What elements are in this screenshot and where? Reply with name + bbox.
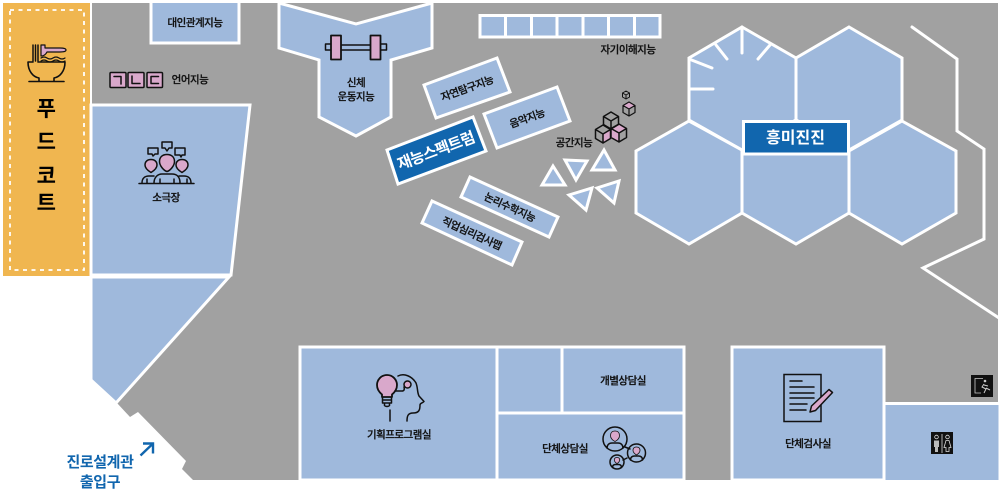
panel: physical kinesthetic intelligence: 운동지능	[338, 91, 375, 103]
panel: small theater: 소극장	[152, 192, 181, 204]
panel: individual counseling room: 개별상담실	[600, 374, 646, 387]
heading: talent spectrum: 재능스펙트럼	[395, 128, 477, 174]
panel: nature exploration intelligence	[424, 58, 510, 118]
panel: small theater	[91, 105, 250, 275]
heading: food court: 코	[37, 165, 56, 188]
panel: interpersonal intelligence: 대인관계지능	[168, 16, 223, 29]
panel: food court	[3, 3, 90, 276]
heading: interest	[744, 122, 848, 154]
icon: head with light bulb	[377, 375, 424, 421]
triangles	[542, 150, 619, 210]
panel: logic math intelligence: 논리수학지능	[482, 190, 538, 225]
panel: program planning room	[300, 347, 497, 480]
panel: small storage room	[497, 347, 562, 413]
panel: individual counseling room	[562, 347, 684, 413]
panel: language intelligence	[110, 72, 209, 88]
icon: cubes	[596, 91, 635, 143]
panel: group counseling room: 단체상담실	[542, 442, 588, 455]
icon: audience	[139, 142, 194, 184]
panel: music intelligence	[484, 87, 570, 148]
heading: talent spectrum	[387, 117, 486, 184]
heading: interest: 흥미진진	[766, 129, 825, 147]
icon: noodle bowl	[28, 45, 66, 82]
icon: barbell	[326, 36, 386, 60]
panel: logic math intelligence	[461, 177, 558, 237]
panel: nature exploration intelligence: 자연탐구지능	[439, 73, 496, 104]
icon: restroom	[931, 432, 953, 454]
icon: connected people	[603, 427, 646, 469]
panel: language intelligence: 언어지능	[172, 74, 209, 86]
callout: main entrance	[66, 444, 153, 490]
heading: food court	[37, 98, 56, 215]
panel: program planning room: 기획프로그램실	[367, 428, 431, 441]
icon: document and pencil	[784, 374, 832, 422]
heading: food court: 푸	[37, 98, 56, 121]
icon: emergency exit	[971, 375, 993, 397]
panel: music intelligence: 음악지능	[508, 106, 547, 131]
panel: lower left room	[91, 277, 229, 403]
panel: group testing room: 단체검사실	[785, 437, 831, 450]
heading: food court: 트	[37, 192, 56, 215]
panel: self-understanding intelligence	[480, 15, 660, 56]
panel: spatial intelligence	[542, 91, 635, 210]
right wall line	[912, 27, 999, 318]
panel: restroom	[884, 404, 1000, 482]
callout: main entrance: 진로설계관	[66, 454, 134, 471]
panel: physical kinesthetic intelligence: 신체	[347, 77, 365, 89]
panel: career psychology map	[422, 201, 522, 265]
panel: spatial intelligence: 공간지능	[556, 137, 593, 149]
panel: group testing room	[732, 347, 884, 480]
panel: interpersonal intelligence	[151, 2, 239, 43]
panel: self-understanding intelligence: 자기이해지능	[601, 43, 656, 56]
heading: food court: 드	[37, 131, 56, 154]
panel: career psychology map: 직업심리검사맵	[440, 214, 504, 253]
panel: physical kinesthetic intelligence	[279, 3, 432, 136]
panel: group counseling room	[497, 413, 684, 480]
panel: interest hexagons	[636, 27, 956, 244]
arrow: to entrance	[140, 444, 153, 456]
icon: hangul blocks	[110, 72, 162, 88]
